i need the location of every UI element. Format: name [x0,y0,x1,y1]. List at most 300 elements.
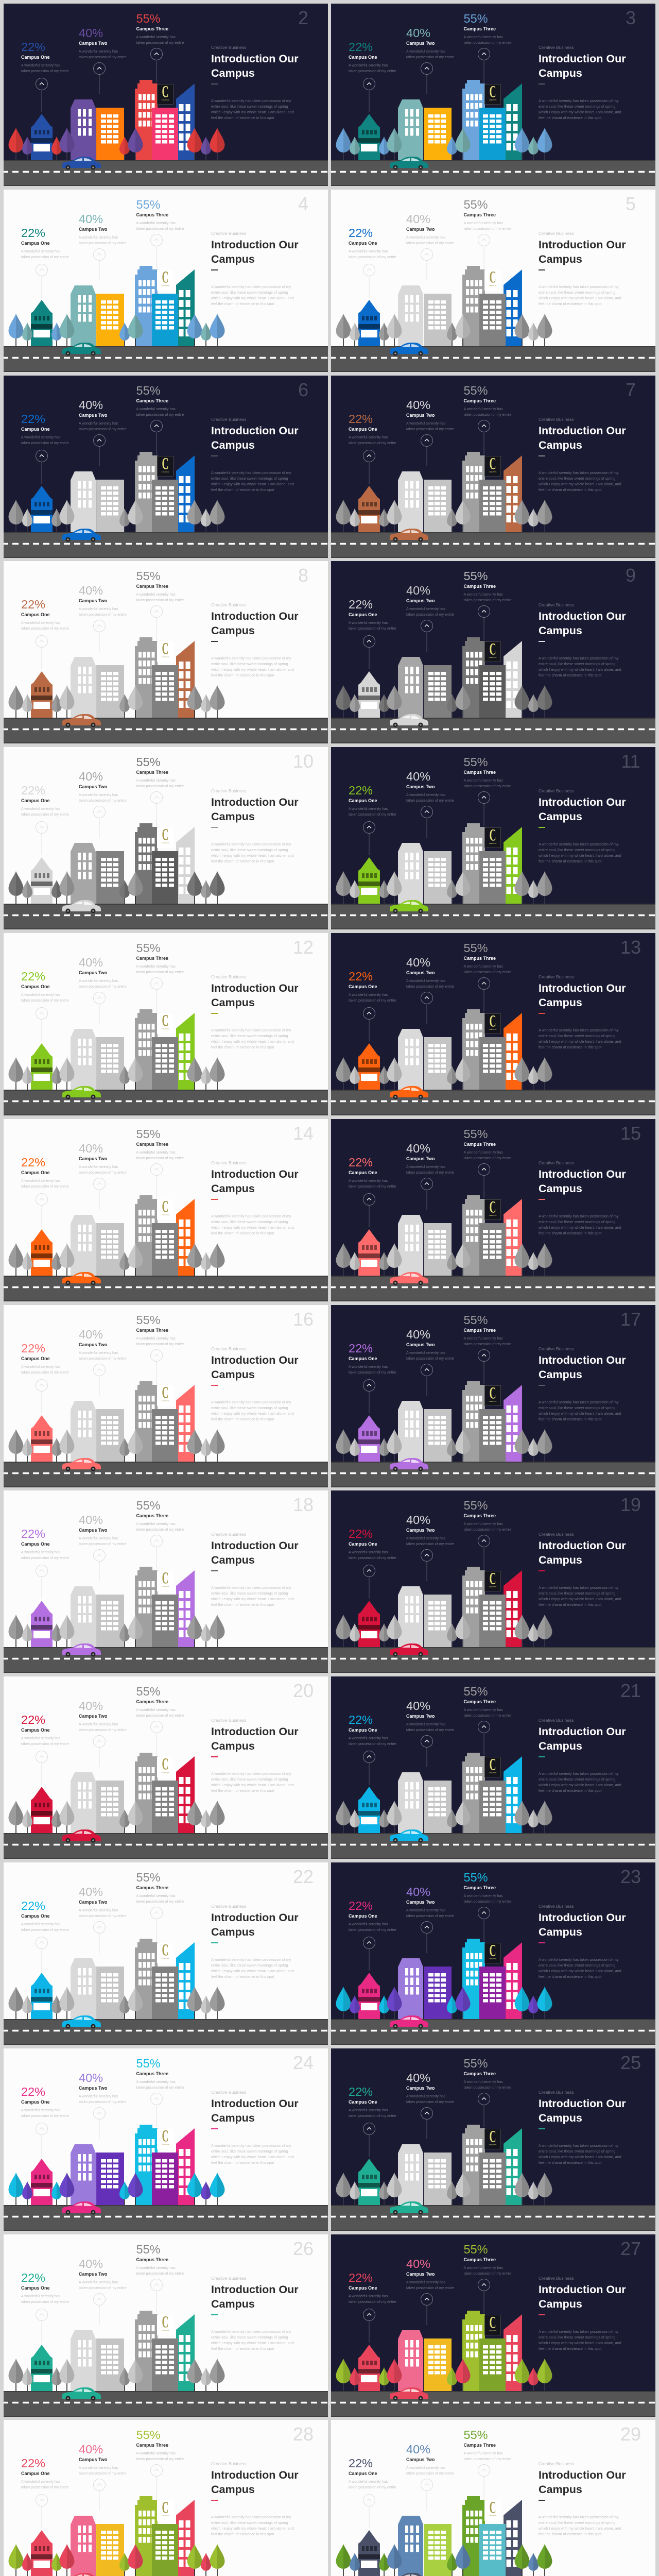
stat: campus two: taken possession of my entire [406,241,454,245]
stat: campus three: taken possession of my entire [136,784,184,788]
slide 26 [4,2234,328,2417]
stat: campus two: Campus Two [406,598,435,603]
stat: campus two: A wonderful serenity has [406,607,445,611]
road [4,1090,328,1115]
intro text: A wonderful serenity has taken possession of my [539,656,618,660]
slide 29 [331,2420,655,2576]
stat: campus three: 55% [136,2243,161,2256]
intro text [539,231,626,306]
road [331,346,655,372]
stat: campus three: A wonderful serenity has [136,1894,176,1898]
slide number: 9 [626,565,636,585]
slide 13 [331,933,655,1115]
stat: campus three: 55% [463,12,488,25]
stat: campus three: A wonderful serenity has [463,222,503,225]
stat: campus three: A wonderful serenity has [136,35,176,39]
logo sign: CREATIVE [489,1772,496,1774]
stat: campus one: Campus One [21,612,50,617]
stat: campus one [349,412,396,445]
city [8,823,224,904]
stat: campus two: 40% [406,1699,430,1713]
slide 2 [4,4,328,186]
slide 15 [331,1119,655,1301]
intro text [539,1904,647,1979]
intro text: Campus [211,810,255,823]
intro text: Campus [539,1740,582,1752]
stat: campus three: taken possession of my entire [136,1714,184,1718]
stat: campus one: Campus One [349,1913,377,1919]
intro text: Introduction Our [539,2097,626,2110]
stat: campus one [21,970,79,1004]
stat: campus one [349,2457,406,2490]
intro text: Introduction Our [211,425,299,437]
stat: campus three: 55% [463,1313,488,1327]
stat: campus three: 55% [136,941,161,955]
road [4,1833,328,1859]
slide number: 22 [293,1866,314,1887]
intro text: Introduction Our [539,2283,626,2296]
stat: campus one [349,1156,406,1189]
pins [36,791,163,855]
stat: campus one: 22% [349,2456,373,2470]
stat: campus one: taken possession of my entire [349,813,396,816]
intro text [539,2461,647,2537]
intro text: feel the charm of existence in this spot [539,487,601,492]
car [62,1643,101,1657]
intro text: feel the charm of existence in this spot [211,487,274,492]
intro text [539,2276,647,2351]
intro text: Creative Business [211,2090,247,2095]
stat: campus two [79,770,136,804]
intro text: feel the charm of existence in this spot [211,2346,274,2351]
stat: campus two [79,1514,136,1547]
stat: campus three [136,2057,194,2091]
stat: campus three: A wonderful serenity has [463,592,503,597]
road [4,1276,328,1301]
pins [36,420,163,484]
stat: campus two: Campus Two [79,2271,107,2276]
stat: campus one [349,40,396,73]
slide number: 18 [293,1494,314,1515]
stat: campus three [136,1314,194,1347]
intro text: Creative Business [539,231,574,236]
road [4,346,328,372]
intro text: Introduction Our [539,610,626,622]
stat: campus three: Campus Three [136,1142,168,1147]
stat: campus one [21,2272,79,2305]
stat: campus three: taken possession of my entire [463,1528,511,1531]
stat: campus three: 55% [136,755,161,769]
stat: campus two: A wonderful serenity has [406,1723,445,1726]
intro text: which I enjoy with my whole heart. I am alone, and [539,482,621,486]
stat: campus two: Campus Two [406,1714,435,1719]
stat: campus one [349,1900,406,1933]
stat: campus one: taken possession of my entire [349,998,396,1003]
logo sign: CREATIVE [162,656,169,658]
stat: campus one: Campus One [349,612,377,617]
intro text: A wonderful serenity has taken possession of my [539,1957,618,1962]
stat: campus one: A wonderful serenity has [349,2295,388,2298]
stat: campus two: taken possession of my entire [406,2472,454,2475]
intro text: entire soul, like these sweet mornings of spring [539,848,615,852]
stat: campus three: 55% [136,384,161,397]
stat: campus two: A wonderful serenity has [406,49,445,54]
stat: campus three [463,198,511,231]
stat: campus two: A wonderful serenity has [79,1165,118,1168]
car [390,714,428,727]
intro text: entire soul, like these sweet mornings of spring [539,1405,615,1410]
road [331,1276,655,1301]
illustration [4,420,328,558]
intro text: Campus [539,1926,582,1938]
stat: campus two: taken possession of my entire [79,428,127,431]
slide 3 [331,4,655,186]
car [62,1272,101,1285]
intro text: Campus [539,996,582,1009]
stat: campus one: taken possession of my entire [349,1742,396,1745]
stat: campus three: 55% [136,1313,161,1327]
logo sign: CREATIVE [162,471,169,473]
intro text: A wonderful serenity has taken possession of my [211,470,291,475]
stat: campus two [406,1142,464,1176]
city [8,2496,224,2576]
stat: campus two: Campus Two [79,40,107,45]
pins [36,2093,163,2157]
pins [36,1535,163,1599]
intro text: which I enjoy with my whole heart. I am alone, and [539,2526,621,2531]
intro text: Introduction Our [211,796,299,808]
intro text: Campus [539,253,582,265]
intro text: entire soul, like these sweet mornings of spring [539,1777,615,1782]
road [4,2205,328,2231]
stat: campus one: Campus One [349,240,377,245]
slide number: 20 [293,1680,314,1701]
slide number: 5 [626,193,636,214]
stat: campus one: Campus One [349,1170,377,1175]
intro text: which I enjoy with my whole heart. I am alone, and [539,2341,621,2345]
intro text: entire soul, like these sweet mornings of spring [211,476,288,481]
logo sign [484,1385,501,1406]
stat: campus two [406,584,454,616]
illustration [331,605,655,743]
stat: campus three: taken possession of my entire [136,1156,184,1160]
stat: campus one: Campus One [21,2285,50,2291]
stat: campus three [463,1128,521,1161]
intro text: Creative Business [211,2461,247,2466]
car [62,900,101,913]
logo sign [157,827,174,848]
stat: campus two [406,398,454,431]
stat: campus three: taken possession of my entire [463,227,511,231]
stat: campus one: Campus One [349,1541,377,1547]
pins [36,978,163,1041]
stat: campus one: A wonderful serenity has [349,436,388,439]
intro text: Creative Business [539,602,574,607]
stat: campus two: Campus Two [79,784,107,789]
stat: campus two: Campus Two [406,1342,435,1347]
stat: campus one [21,2086,79,2119]
stat: campus one: 22% [349,784,373,797]
stat: campus three [136,1685,194,1719]
pins [363,1721,490,1785]
stat: campus three: taken possession of my entire [136,2272,184,2275]
stat: campus one: Campus One [21,55,50,60]
intro text: which I enjoy with my whole heart. I am alone, and [211,1969,294,1973]
stat: campus two: A wonderful serenity has [79,1908,118,1912]
illustration [4,48,328,186]
stat: campus two: taken possession of my entire [79,2286,127,2290]
intro text [211,602,299,677]
logo sign: CREATIVE [162,1585,169,1587]
stat: campus three: 55% [136,12,161,25]
stat: campus three: 55% [136,1871,161,1884]
road [331,1090,655,1115]
city [336,637,552,718]
intro text: Creative Business [211,1718,247,1723]
logo sign [484,1013,501,1034]
slide 11 [331,747,655,929]
intro text: feel the charm of existence in this spot [539,301,601,306]
intro text: feel the charm of existence in this spot [539,1788,601,1793]
intro text: entire soul, like these sweet mornings of spring [539,1219,615,1224]
intro text: Introduction Our [211,1911,299,1924]
stat: campus two [79,584,127,616]
stat: campus two: Campus Two [79,1714,107,1719]
intro text: Campus [211,2112,255,2124]
road [331,1462,655,1487]
intro text: feel the charm of existence in this spot [211,2160,274,2165]
intro text: entire soul, like these sweet mornings of spring [539,1033,615,1038]
road [331,1833,655,1859]
intro text: Campus [211,253,255,265]
stat: campus two: 40% [79,2071,103,2084]
stat: campus two: taken possession of my entire [406,1357,454,1360]
stat: campus one: Campus One [21,427,50,432]
city [8,637,224,718]
intro text: entire soul, like these sweet mornings of spring [539,2149,615,2154]
slide 25 [331,2048,655,2231]
stat: campus one [21,412,69,445]
stat: campus three: taken possession of my entire [463,2272,511,2275]
stat: campus two: A wonderful serenity has [406,421,445,426]
logo sign: CREATIVE [489,2330,496,2332]
stat: campus three [463,1871,521,1904]
stat: campus one: 22% [21,226,45,240]
stat: campus two: 40% [406,956,430,969]
intro text: entire soul, like these sweet mornings of spring [211,848,288,852]
intro text: feel the charm of existence in this spot [211,115,274,120]
logo sign: CREATIVE [489,284,496,286]
intro text: entire soul, like these sweet mornings of spring [539,476,615,481]
illustration [331,1862,655,2045]
stat: campus two [79,398,127,431]
stat: campus three: 55% [136,1685,161,1698]
stat: campus two: taken possession of my entire [79,985,127,988]
intro text: Campus [539,1554,582,1566]
road [331,2019,655,2045]
pins [36,48,163,112]
stat: campus one: 22% [21,1342,45,1355]
stat: campus three [463,1685,521,1719]
stat: campus one: taken possession of my entire [21,1370,69,1375]
illustration [4,747,328,929]
slide number: 13 [620,937,641,957]
stat: campus three: Campus Three [136,955,168,960]
car [62,529,101,542]
intro text: which I enjoy with my whole heart. I am alone, and [539,296,621,300]
slide 27 [331,2234,655,2417]
stat: campus two: taken possession of my entire [406,1543,454,1546]
logo sign: CREATIVE [162,1771,169,1773]
intro text: which I enjoy with my whole heart. I am alone, and [211,1597,294,1601]
intro text: Campus [539,67,582,79]
stat: campus three [136,756,194,789]
logo sign [157,1757,174,1777]
stat: campus two: 40% [406,584,430,597]
intro text: A wonderful serenity has taken possession of my [211,284,291,289]
stat: campus two: 40% [79,956,103,969]
intro text [539,1718,647,1793]
stat: campus two [79,2258,136,2291]
pins [36,2465,163,2528]
intro text: A wonderful serenity has taken possession of my [211,98,291,103]
illustration [331,48,655,186]
intro text [211,417,299,492]
stat: campus two [406,956,464,989]
stat: campus three: Campus Three [463,1327,496,1332]
stat: campus one: A wonderful serenity has [21,1365,60,1368]
illustration [4,1862,328,2045]
stat: campus two: A wonderful serenity has [406,2280,445,2284]
stat: campus three: Campus Three [136,212,168,217]
intro text: entire soul, like these sweet mornings of spring [211,1963,288,1968]
intro text: Introduction Our [211,53,299,65]
pins [363,2093,490,2157]
intro text: Introduction Our [211,1354,299,1366]
stat: campus three [136,12,184,44]
car [390,900,428,913]
stat: campus two: A wonderful serenity has [79,793,118,796]
intro text [539,1346,647,1422]
stat: campus two [79,2072,136,2105]
logo sign [157,84,174,105]
stat: campus one: A wonderful serenity has [349,64,388,67]
stat: campus one [349,784,406,817]
logo sign: CREATIVE [162,842,169,844]
stat: campus two: 40% [406,2071,430,2084]
stat: campus three: 55% [463,198,488,211]
stat: campus one [21,1342,79,1376]
city [336,1753,552,1833]
pins [36,1163,163,1227]
stat: campus three [463,756,521,789]
city [336,2125,552,2205]
stat: campus three: Campus Three [463,398,496,403]
stat: campus three: Campus Three [463,1513,496,1518]
stat: campus two: taken possession of my entire [79,1728,127,1732]
stat: campus three: taken possession of my entire [463,1714,511,1718]
stat: campus two: Campus Two [79,1899,107,1904]
logo sign: CREATIVE [162,1028,169,1030]
intro text: entire soul, like these sweet mornings of spring [539,2335,615,2340]
stat: campus two [79,1142,136,1176]
intro text [211,974,319,1050]
stat: campus three: taken possession of my entire [463,1900,511,1903]
stat: campus one [349,226,396,259]
stat: campus two: 40% [406,1328,430,1341]
intro text: A wonderful serenity has taken possession of my [539,1028,618,1032]
intro text: which I enjoy with my whole heart. I am alone, and [211,110,294,114]
stat: campus one: 22% [21,40,45,54]
stat: campus two [406,1514,464,1547]
intro text: Creative Business [539,1346,574,1351]
logo sign: CREATIVE [489,1400,496,1402]
slide 24 [4,2048,328,2231]
intro text: Campus [539,1182,582,1195]
stat: campus two: Campus Two [406,412,435,417]
stat: campus two: Campus Two [406,227,435,232]
intro text: Introduction Our [211,1725,299,1738]
slide number: 27 [620,2238,641,2259]
stat: campus three: 55% [463,384,488,397]
logo sign [157,456,174,477]
stat: campus one: Campus One [349,1356,377,1361]
stat: campus one: A wonderful serenity has [21,2108,60,2112]
stat: campus three: Campus Three [463,212,496,217]
pins [36,606,163,669]
stat: campus one: A wonderful serenity has [21,2480,60,2483]
intro text [211,1718,319,1793]
intro text [539,788,647,864]
stat: campus two: 40% [79,1699,103,1713]
intro text: Campus [211,1554,255,1566]
stat: campus two: 40% [406,2443,430,2456]
road [331,160,655,186]
stat: campus one: 22% [21,598,45,611]
stat: campus three: Campus Three [463,1142,496,1147]
stat: campus three: A wonderful serenity has [136,1522,176,1526]
car [390,2015,428,2029]
stat: campus three: Campus Three [463,583,496,588]
stat: campus two: taken possession of my entire [79,799,127,803]
car [62,1458,101,1471]
intro text [211,45,299,120]
stat: campus one: taken possession of my entire [21,813,69,816]
intro text: Introduction Our [539,1168,626,1180]
intro text: Campus [211,67,255,79]
city [8,1753,224,1833]
slide 22 [4,1862,328,2045]
slide 9 [331,561,655,743]
stat: campus one: taken possession of my entire [21,69,69,73]
stat: campus two [79,26,127,59]
stat: campus one [21,2457,79,2490]
stat: campus one: taken possession of my entire [21,1742,69,1745]
slide number: 10 [293,750,314,772]
intro text: entire soul, like these sweet mornings of spring [539,1963,615,1968]
intro text: Introduction Our [539,239,626,251]
stat: campus three: A wonderful serenity has [463,1708,503,1711]
stat: campus two [406,770,464,804]
stat: campus one: 22% [21,784,45,797]
stat: campus one: A wonderful serenity has [349,1179,388,1183]
slide number: 6 [298,379,308,400]
intro text: entire soul, like these sweet mornings of spring [211,1777,288,1782]
intro text: Introduction Our [539,53,626,65]
stat: campus one: 22% [21,970,45,983]
intro text [539,974,647,1050]
stat: campus three [463,569,511,602]
